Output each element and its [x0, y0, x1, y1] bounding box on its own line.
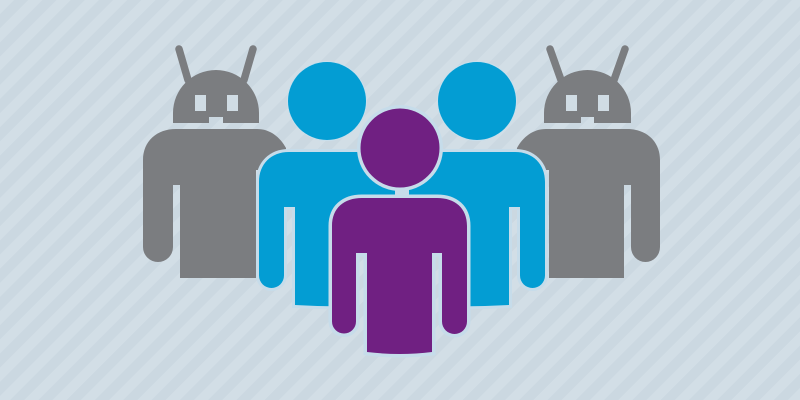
robot: right [517, 49, 660, 278]
person: blue left [259, 62, 395, 306]
person: blue right [409, 62, 545, 306]
robot: left [143, 49, 286, 278]
person: purple center [332, 108, 467, 354]
